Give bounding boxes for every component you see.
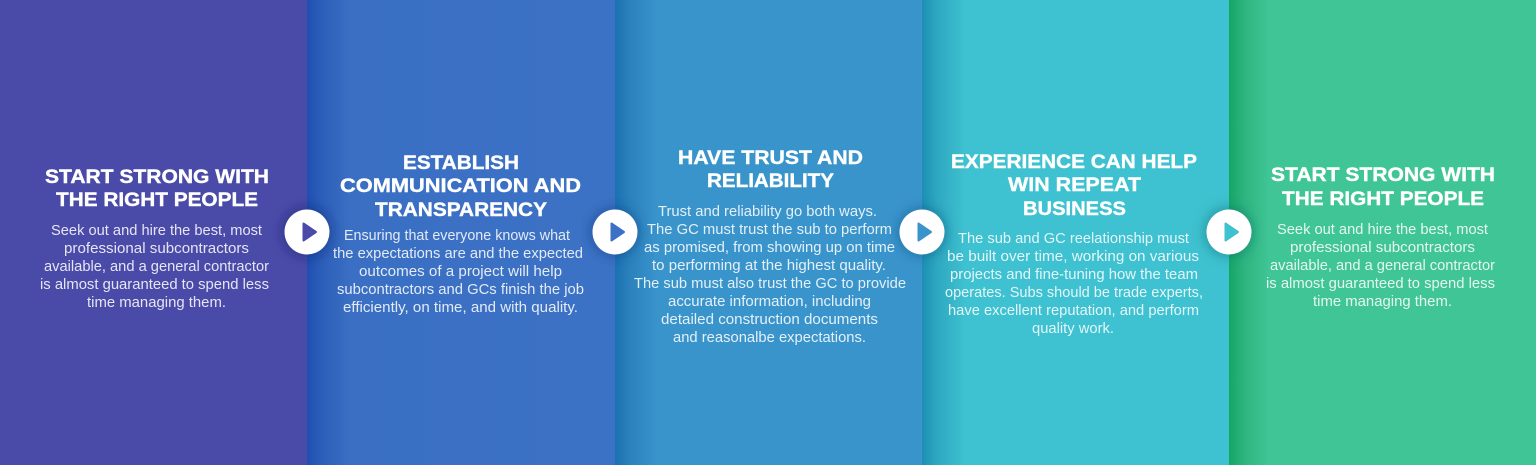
panel 2 heading: TRANSPARENCY <box>375 199 547 221</box>
panel 4 body text: The sub and GC reelationship must <box>958 231 1189 247</box>
panel 2 body text: the expectations are and the expected <box>333 246 583 262</box>
panel 4 body text: operates. Subs should be trade experts, <box>945 285 1203 301</box>
arrow button 2 <box>591 208 639 256</box>
panel 5 body text: available, and a general contractor <box>1270 258 1495 274</box>
panel 3 body text: and reasonalbe expectations. <box>673 330 866 346</box>
panel 2 heading <box>340 152 581 221</box>
panel 4 body text: projects and fine-tuning how the team <box>950 267 1198 283</box>
panel 3 body text: to performing at the highest quality. <box>652 258 886 274</box>
panel 1 background <box>0 0 307 465</box>
panel 1 body text: Seek out and hire the best, most <box>51 223 262 239</box>
panel 5 body text: Seek out and hire the best, most <box>1277 222 1488 238</box>
panel 3 heading: HAVE TRUST AND <box>678 147 863 169</box>
panel 3 body text: accurate information, including <box>668 294 871 310</box>
panel 1 body text: professional subcontractors <box>64 241 249 257</box>
panel 2 body text: efficiently, on time, and with quality. <box>343 300 578 316</box>
panel 4 heading: BUSINESS <box>1023 198 1126 220</box>
panel 5 heading: THE RIGHT PEOPLE <box>1282 188 1484 210</box>
panel 3 body text <box>634 204 906 346</box>
panel 4 heading <box>951 151 1197 220</box>
panel 4 body text: quality work. <box>1032 321 1114 337</box>
panel 1 body text <box>40 223 269 311</box>
panel 1 heading: START STRONG WITH <box>45 166 269 188</box>
panel 1 body text: time managing them. <box>87 295 226 311</box>
panel 4 body text: have excellent reputation, and perform <box>948 303 1199 319</box>
panel 4 background <box>922 0 1229 465</box>
panel 3 heading <box>678 147 863 192</box>
panel 2 background <box>307 0 615 465</box>
panel 4 body text: be built over time, working on various <box>947 249 1199 265</box>
panel 4 heading: EXPERIENCE CAN HELP <box>951 151 1197 173</box>
arrow button 1 <box>283 208 331 256</box>
panel 3 background <box>615 0 922 465</box>
panel 2 body text: subcontractors and GCs finish the job <box>337 282 584 298</box>
panel 5 background <box>1229 0 1536 465</box>
panel 5 body text <box>1266 222 1495 310</box>
panel: communication <box>307 0 615 465</box>
panel 2 heading: ESTABLISH <box>403 152 519 174</box>
panel 5 body text: time managing them. <box>1313 294 1452 310</box>
panel 2 body text: Ensuring that everyone knows what <box>344 228 570 244</box>
panel 3 body text: as promised, from showing up on time <box>644 240 895 256</box>
panel 3 body text: Trust and reliability go both ways. <box>658 204 877 220</box>
arrow button 4 <box>1205 208 1253 256</box>
panel: start strong <box>0 0 307 465</box>
panel 3 body text: detailed construction documents <box>661 312 878 328</box>
panel: start strong repeat <box>1229 0 1536 465</box>
panel 3 body text: The GC must trust the sub to perform <box>647 222 892 238</box>
panel 4 body text <box>945 231 1203 337</box>
panel 1 heading: THE RIGHT PEOPLE <box>56 189 258 211</box>
panel 5 body text: professional subcontractors <box>1290 240 1475 256</box>
panel: repeat business <box>922 0 1229 465</box>
panel 3 body text: The sub must also trust the GC to provide <box>634 276 906 292</box>
arrow button 3 <box>898 208 946 256</box>
panel: trust and reliability <box>615 0 922 465</box>
panel 2 body text <box>333 228 584 316</box>
panel 1 body text: available, and a general contractor <box>44 259 269 275</box>
panel 5 body text: is almost guaranteed to spend less <box>1266 276 1495 292</box>
panel 2 heading: COMMUNICATION AND <box>340 175 581 197</box>
panel 4 heading: WIN REPEAT <box>1008 174 1141 196</box>
panel 5 heading <box>1271 164 1495 210</box>
panel 5 heading: START STRONG WITH <box>1271 164 1495 186</box>
panel 1 heading <box>45 166 269 211</box>
panel 1 body text: is almost guaranteed to spend less <box>40 277 269 293</box>
panel 2 body text: outcomes of a project will help <box>359 264 562 280</box>
panel 3 heading: RELIABILITY <box>707 170 834 192</box>
